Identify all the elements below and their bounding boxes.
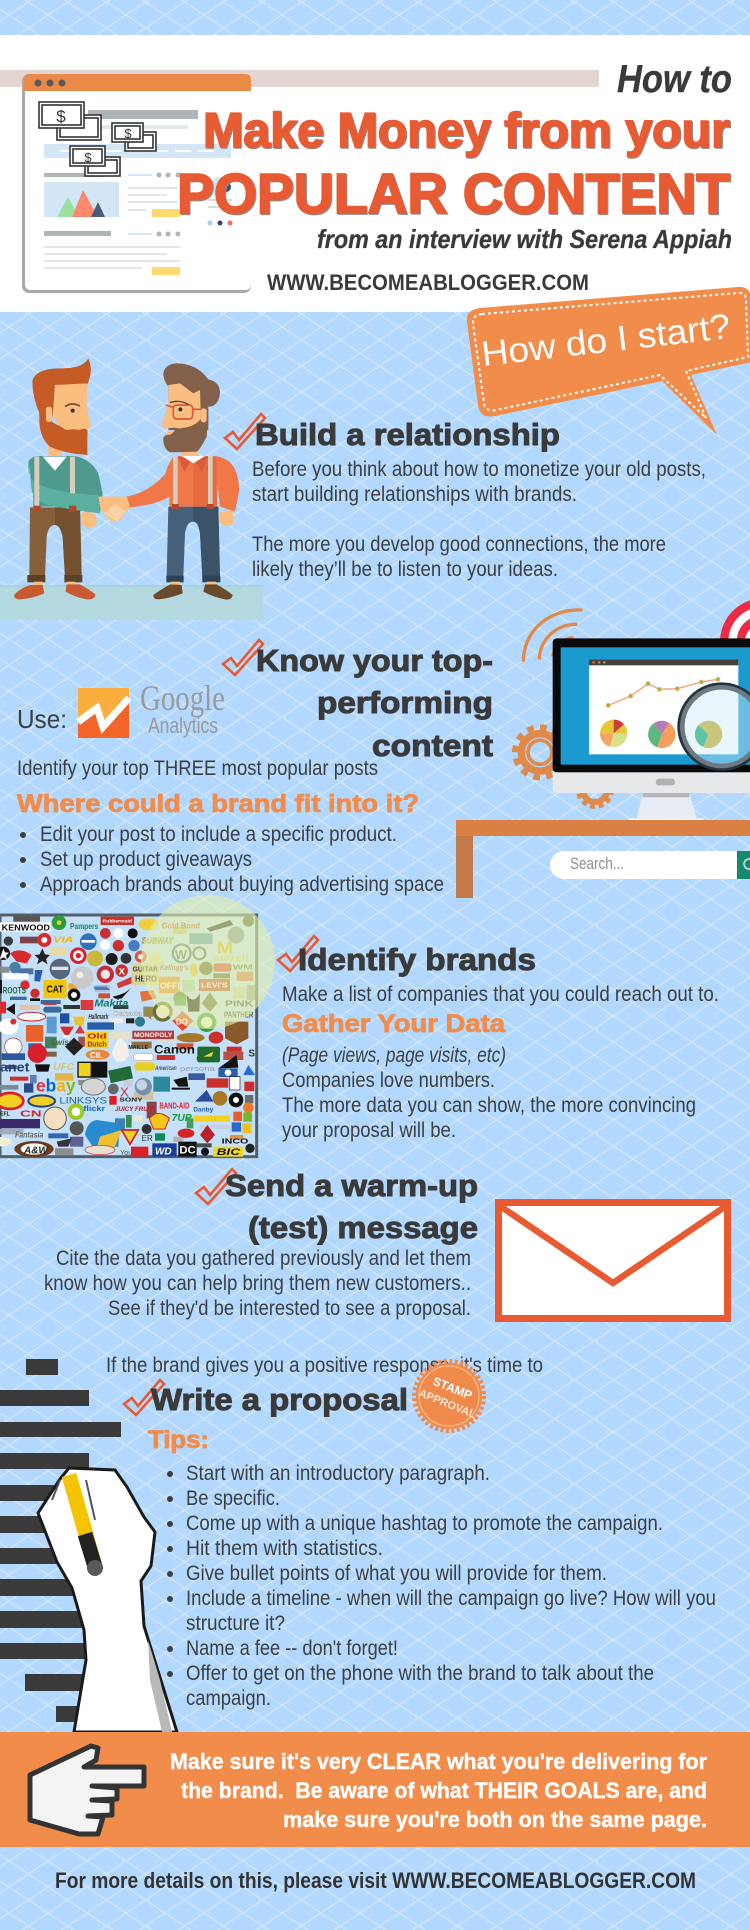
text: build a relationship bbox=[252, 458, 706, 581]
title: Make Money from your bbox=[203, 104, 730, 158]
image: brand logos collage: HERO bbox=[135, 974, 157, 984]
handshake bbox=[98, 497, 130, 522]
text: identify top posts: Identify your top THREE most popular posts bbox=[17, 757, 378, 780]
check mark: identify brands bbox=[278, 936, 318, 971]
image: brand logos collage: X bbox=[119, 966, 126, 976]
bullet list: tips bbox=[167, 1462, 716, 1710]
title: WWW.BECOMEABLOGGER.COM bbox=[267, 270, 589, 295]
image: brand logos collage: Canon bbox=[154, 1042, 195, 1056]
image: brand logos collage: anet bbox=[0, 1061, 30, 1075]
use google analytics: Use: bbox=[17, 704, 67, 734]
image: brand logos collage: WD bbox=[155, 1146, 172, 1157]
bullet list: tips: Name a fee -- don't forget! bbox=[186, 1637, 398, 1660]
image: brand logos collage: American bbox=[154, 1065, 177, 1072]
text: gather your data: Companies love numbers. bbox=[282, 1069, 495, 1092]
image: brand logos collage: Hallmark bbox=[88, 1012, 109, 1021]
check mark: write a proposal bbox=[124, 1380, 164, 1415]
bullet list: tips: Offer to get on the phone with the brand to talk about the bbox=[186, 1662, 654, 1685]
text: build a relationship: Before you think about how to monetize your old posts, bbox=[252, 458, 706, 481]
image: brand logos collage: INCO bbox=[222, 1136, 248, 1145]
monitor bbox=[553, 638, 750, 821]
image: brand logos collage: Fantasia bbox=[15, 1131, 44, 1140]
heading: know your top-performing content: performing bbox=[317, 685, 493, 720]
icon: target bbox=[720, 598, 750, 685]
bullet list: tips: Start with an introductory paragraph. bbox=[186, 1462, 490, 1485]
heading: know your top-performing content bbox=[256, 643, 493, 763]
illustration: analytics monitor on desk bbox=[456, 598, 750, 898]
image: brand logos collage: You bbox=[120, 1148, 132, 1157]
bullet list: tips: structure it? bbox=[186, 1612, 285, 1635]
icon: envelope bbox=[498, 1202, 728, 1318]
icon: money bills: $ bbox=[124, 126, 132, 141]
text: warm-up message: Cite the data you gathered previously and let them bbox=[56, 1247, 471, 1270]
image: brand logos collage: ROOTS bbox=[3, 986, 26, 996]
image: brand logos collage: CIL bbox=[90, 1051, 103, 1060]
image: brand logos collage: JUICY FRUIT bbox=[115, 1107, 155, 1113]
bullet list: tips: campaign. bbox=[186, 1687, 271, 1710]
image: brand logos collage: Canada bbox=[113, 1011, 142, 1018]
image: brand logos collage: Makita bbox=[94, 999, 129, 1010]
image: brand logos collage: VIA bbox=[53, 934, 73, 944]
illustration: browser window with money bbox=[22, 74, 251, 293]
header band bbox=[0, 35, 750, 312]
text: gather your data bbox=[282, 1044, 696, 1142]
heading: know your top-performing content: content bbox=[372, 728, 493, 763]
image: brand logos collage: UFC bbox=[53, 1062, 75, 1073]
image: brand logos collage: S bbox=[248, 1049, 255, 1060]
text: warm-up message: know how you can help bring them new customers.. bbox=[44, 1272, 471, 1295]
image: brand logos collage: W bbox=[175, 948, 187, 962]
bullet list: brand ideas: Edit your post to include a specific product. bbox=[40, 823, 397, 846]
image: brand logos collage: KENWOOD bbox=[2, 922, 50, 932]
icon: money bills bbox=[39, 102, 156, 176]
text: gather your data: The more data you can show, the more convincing bbox=[282, 1094, 696, 1117]
icon: gears bbox=[515, 728, 612, 807]
magnifying glass bbox=[678, 683, 750, 770]
image: brand logos collage: Dutch bbox=[87, 1042, 107, 1049]
image: brand logos collage: LEVI'S bbox=[201, 980, 228, 989]
image: brand logos collage: flickr bbox=[83, 1106, 105, 1113]
image: brand logos collage: DQ bbox=[176, 1017, 188, 1026]
check mark: build a relationship bbox=[225, 414, 265, 449]
desk bbox=[456, 820, 750, 898]
icon: money bills: $ bbox=[84, 150, 92, 165]
text: warm-up message: See if they'd be interested to see a proposal. bbox=[108, 1297, 471, 1320]
subheading: tips: Tips: bbox=[148, 1426, 209, 1454]
text: build a relationship: The more you develop good connections, the more bbox=[252, 533, 666, 556]
search box bbox=[550, 851, 750, 879]
callout text: the brand. Be aware of what THEIR GOALS are, and bbox=[181, 1778, 707, 1803]
subheading: gather your data: Gather Your Data bbox=[282, 1010, 506, 1038]
text: positive response: If the brand gives you a positive response, it's time to bbox=[106, 1354, 543, 1377]
callout text bbox=[170, 1749, 707, 1832]
icon: signal arcs bbox=[523, 610, 582, 662]
image: brand logos collage: OFF! bbox=[160, 980, 180, 990]
bullet list: tips: Be specific. bbox=[186, 1487, 280, 1510]
heading: send a warm-up message: (test) message bbox=[248, 1210, 478, 1245]
bullet list: tips: Hit them with statistics. bbox=[186, 1537, 383, 1560]
heading: build a relationship: Build a relationship bbox=[255, 417, 560, 452]
bullet list: tips: Give bullet points of what you will provide for them. bbox=[186, 1562, 607, 1585]
callout text: make sure you're both on the same page. bbox=[283, 1807, 707, 1832]
image: brand logos collage: persona bbox=[180, 1066, 215, 1073]
image: brand logos collage: DC bbox=[179, 1145, 196, 1157]
chart-like dark bars bbox=[0, 1359, 121, 1722]
image: brand logos collage: WM bbox=[233, 963, 253, 972]
image: brand logos collage: Kellogg's bbox=[160, 963, 188, 972]
image: brand logos collage: BAND-AID bbox=[159, 1100, 189, 1110]
icon: google analytics logo bbox=[78, 688, 129, 738]
heading: write a proposal: Write a proposal bbox=[151, 1382, 408, 1417]
image: brand logos collage: X bbox=[120, 1085, 129, 1100]
image: brand logos collage: Old bbox=[87, 1033, 107, 1040]
image: brand logos collage: MONOPOLY bbox=[134, 1032, 173, 1039]
text: gather your data: your proposal will be. bbox=[282, 1119, 456, 1142]
title: POPULAR CONTENT bbox=[177, 162, 730, 226]
heading: send a warm-up message: Send a warm-up bbox=[225, 1168, 478, 1203]
image: brand logos collage: Rubbermaid bbox=[103, 919, 132, 924]
image: brand logos collage: MAILLE bbox=[128, 1045, 149, 1051]
image: brand logos collage: EFL bbox=[0, 1112, 11, 1118]
image: brand logos collage: Pampers bbox=[70, 922, 99, 931]
image: brand logos collage: A&W bbox=[23, 1145, 49, 1156]
text: build a relationship: start building relationships with brands. bbox=[252, 483, 577, 506]
speech bubble: how do I start: How do I start? bbox=[479, 307, 732, 374]
search box: Search... bbox=[570, 854, 624, 873]
image: brand logos collage: GUITAR bbox=[133, 965, 159, 974]
image: brand logos collage: CAT bbox=[47, 985, 63, 996]
icon: money bills: $ bbox=[56, 107, 66, 126]
image: brand logos collage: Danby bbox=[193, 1108, 214, 1114]
icon: hand holding pencil bbox=[38, 1468, 177, 1732]
use google analytics: Analytics bbox=[148, 713, 218, 738]
speech bubble: how do I start bbox=[467, 287, 750, 435]
right man bbox=[127, 363, 239, 600]
image: brand logos collage: LINKSYS bbox=[59, 1095, 107, 1105]
image: brand logos collage bbox=[0, 915, 257, 1157]
image: brand logos collage: BIC bbox=[217, 1147, 240, 1157]
image: brand logos collage: SONY bbox=[119, 1098, 143, 1104]
text: warm-up message bbox=[44, 1247, 471, 1320]
check mark: warm-up message bbox=[196, 1169, 236, 1204]
image: brand logos collage: CN bbox=[20, 1108, 42, 1118]
image: brand logos collage: ebay bbox=[36, 1076, 76, 1096]
subheading: where could a brand fit: Where could a brand fit into it? bbox=[17, 790, 419, 818]
bullet list: brand ideas: Approach brands about buying advertising space bbox=[40, 873, 444, 896]
check mark: know your content bbox=[223, 640, 263, 675]
text: gather your data: (Page views, page visits, etc) bbox=[282, 1044, 506, 1067]
icon: pointing hand bbox=[30, 1746, 144, 1834]
bullet list: brand ideas: Set up product giveaways bbox=[40, 848, 252, 871]
heading: send a warm-up message bbox=[225, 1168, 478, 1245]
image: brand logos collage: 7UP bbox=[172, 1113, 192, 1124]
icon: stamp of approval: STAMP bbox=[431, 1374, 474, 1402]
title bbox=[177, 58, 732, 295]
image: brand logos collage: ER bbox=[142, 1134, 153, 1143]
callout text: Make sure it's very CLEAR what you're delivering for bbox=[170, 1749, 707, 1774]
illustration: two men shaking hands bbox=[0, 358, 263, 620]
bullet list: tips: Come up with a unique hashtag to promote the campaign. bbox=[186, 1512, 663, 1535]
heading: know your top-performing content: Know your top- bbox=[256, 643, 493, 678]
left man bbox=[14, 358, 103, 599]
image: brand logos collage: M bbox=[217, 937, 233, 957]
use google analytics bbox=[17, 678, 225, 738]
text: build a relationship: likely they’ll be to listen to your ideas. bbox=[252, 558, 558, 581]
image: brand logos collage: SUBWAY bbox=[142, 935, 174, 945]
callout banner bbox=[0, 1732, 750, 1847]
image: brand logos collage: PINK bbox=[225, 999, 254, 1009]
title: How to bbox=[617, 58, 732, 101]
image: brand logos collage: maxell bbox=[213, 953, 248, 963]
image: brand logos collage: PANTHER bbox=[224, 1010, 254, 1020]
heading: identify brands: Identify brands bbox=[298, 942, 536, 977]
icon: stamp of approval: APPROVAL bbox=[417, 1387, 478, 1421]
image: brand logos collage: Gold Bond bbox=[162, 921, 200, 930]
icon: stamp of approval bbox=[414, 1361, 484, 1431]
image: brand logos collage: Swiss bbox=[51, 1038, 74, 1047]
bullet list: brand ideas bbox=[20, 823, 444, 896]
green highlight circle bbox=[141, 895, 275, 1029]
use google analytics: Google bbox=[140, 678, 225, 718]
